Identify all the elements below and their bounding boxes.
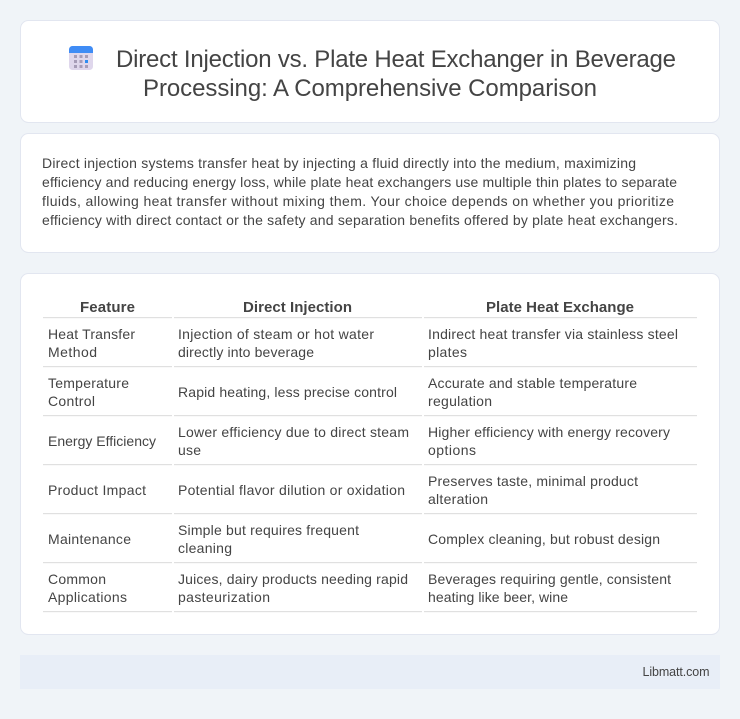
row: common applications: Beverages requiring gentle, consistent — [428, 571, 671, 587]
row: common applications: pasteurization — [178, 589, 270, 605]
row: temperature control: regulation — [428, 393, 492, 409]
table header — [80, 299, 634, 316]
footer bar — [20, 655, 720, 689]
row: product impact — [48, 473, 638, 507]
intro text: efficiency and reducing energy loss, while plate heat exchangers use multiple thin plates to separate — [42, 174, 677, 190]
row: temperature control: Accurate and stable temperature — [428, 375, 637, 391]
intro text: efficiency with direct contact or the safety and separation benefits offered by plate heat exchangers. — [42, 212, 678, 228]
row: product impact: alteration — [428, 491, 488, 507]
row: maintenance: Complex cleaning, but robust design — [428, 531, 660, 547]
row: heat transfer method: plates — [428, 344, 467, 360]
row: energy efficiency: Higher efficiency with energy recovery — [428, 424, 670, 440]
row: energy efficiency: Energy Efficiency — [48, 433, 156, 449]
row: heat transfer method: Method — [48, 344, 97, 360]
table header: Direct Injection — [243, 299, 352, 316]
panel: title card — [20, 20, 720, 122]
row: heat transfer method: Injection of steam or hot water — [178, 326, 374, 342]
row: maintenance — [48, 522, 660, 556]
row: common applications: Common — [48, 571, 106, 587]
row: energy efficiency: options — [428, 442, 476, 458]
row: heat transfer method: directly into beverage — [178, 344, 314, 360]
intro text — [42, 155, 678, 228]
row: product impact: Potential flavor dilution or oxidation — [178, 482, 405, 498]
row: temperature control: Rapid heating, less precise control — [178, 384, 397, 400]
row: energy efficiency: use — [178, 442, 201, 458]
title — [116, 46, 676, 102]
row: common applications — [48, 571, 671, 605]
row: energy efficiency: Lower efficiency due to direct steam — [178, 424, 409, 440]
intro text: Direct injection systems transfer heat by injecting a fluid directly into the medium, maximizing — [42, 155, 636, 171]
intro text: fluids, allowing heat transfer without mixing them. Your choice depends on whether you prioritize — [42, 193, 674, 209]
icon: calendar — [69, 46, 93, 70]
table header: Feature — [80, 299, 135, 316]
row: temperature control: Control — [48, 393, 95, 409]
row: heat transfer method — [48, 326, 678, 360]
row: maintenance: Maintenance — [48, 531, 131, 547]
title: Direct Injection vs. Plate Heat Exchanger in Beverage — [116, 46, 676, 73]
table header: Plate Heat Exchange — [486, 299, 634, 316]
row: product impact: Preserves taste, minimal product — [428, 473, 638, 489]
panel: comparison table — [20, 274, 720, 634]
row: energy efficiency — [48, 424, 670, 458]
row: maintenance: Simple but requires frequent — [178, 522, 359, 538]
row: heat transfer method: Indirect heat transfer via stainless steel — [428, 326, 678, 342]
row: temperature control: Temperature — [48, 375, 129, 391]
title: Processing: A Comprehensive Comparison — [143, 75, 597, 102]
row: product impact: Product Impact — [48, 482, 146, 498]
footer text: Libmatt.com — [642, 665, 710, 679]
row: common applications: heating like beer, wine — [428, 589, 568, 605]
panel: introduction — [20, 134, 720, 252]
row: maintenance: cleaning — [178, 540, 232, 556]
row: common applications: Applications — [48, 589, 127, 605]
row: heat transfer method: Heat Transfer — [48, 326, 135, 342]
row: common applications: Juices, dairy products needing rapid — [178, 571, 408, 587]
row: temperature control — [48, 375, 637, 409]
